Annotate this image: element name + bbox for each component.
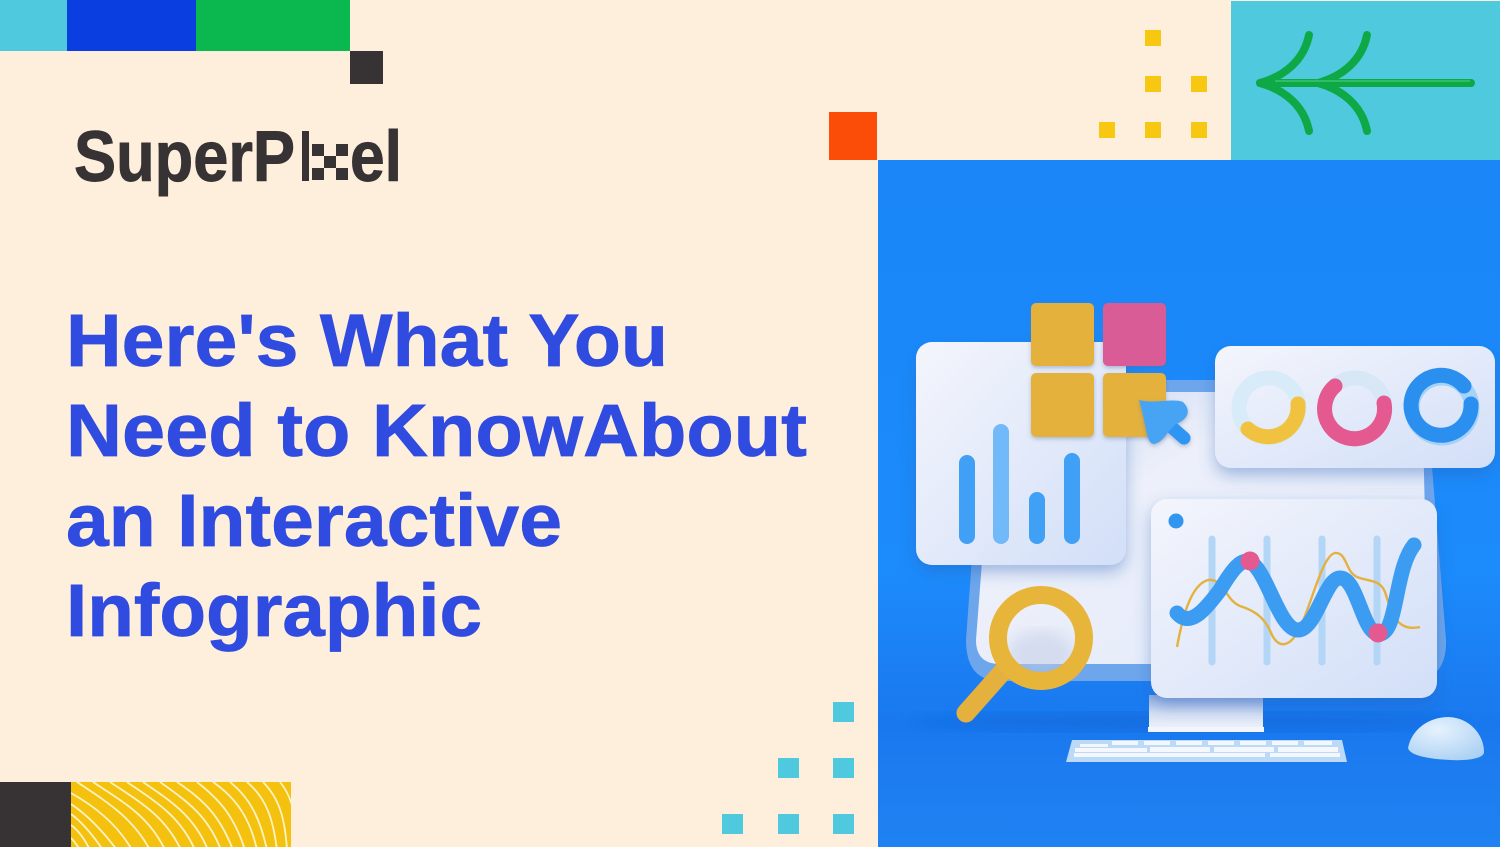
logo: SuperPixel: el xyxy=(350,118,402,197)
panel: bar chart card xyxy=(916,342,1126,565)
title: an Interactive xyxy=(66,479,562,562)
tile grid: yellow and pink squares xyxy=(1031,303,1166,437)
line chart xyxy=(1168,514,1420,662)
title: Here's What You xyxy=(66,299,668,382)
bar chart xyxy=(959,424,1080,544)
logo: SuperPixel: SuperP xyxy=(74,118,295,197)
orange accent square xyxy=(829,112,877,160)
monitor stand xyxy=(1148,695,1264,732)
keyboard xyxy=(1066,740,1347,762)
blue illustration background xyxy=(878,160,1500,847)
yellow dot pattern xyxy=(1099,30,1207,138)
panel: donut rings card xyxy=(1215,346,1495,468)
cyan arrow tile xyxy=(1231,1,1500,160)
panel: line chart card xyxy=(1151,499,1437,698)
title: Infographic xyxy=(66,569,482,652)
corner blocks: top left colour strip xyxy=(0,0,383,84)
bottom left yellow wave pattern xyxy=(71,782,294,847)
mouse xyxy=(1408,717,1484,760)
icon: cursor arrow xyxy=(1139,400,1188,444)
donut rings xyxy=(1239,375,1472,439)
illustration: dashboard computer xyxy=(910,303,1495,762)
monitor xyxy=(966,380,1446,681)
icon: magnifying glass xyxy=(966,595,1084,713)
bottom left dark block xyxy=(0,782,71,847)
title xyxy=(66,299,807,652)
bottom right cyan dot pattern xyxy=(722,702,854,834)
ground shadow xyxy=(910,713,1470,731)
title: Need to KnowAbout xyxy=(66,389,807,472)
